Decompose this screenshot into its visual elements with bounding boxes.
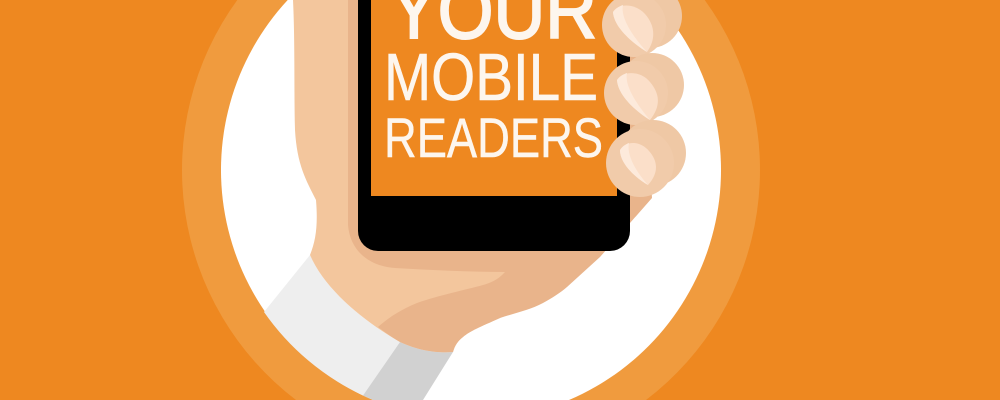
phone screen (371, 0, 617, 196)
screen text: MOBILE (384, 40, 598, 115)
cuff shadow (363, 342, 453, 400)
finger 1 (602, 0, 682, 57)
fingers (602, 0, 686, 197)
hand (293, 0, 652, 352)
finger 2 (604, 53, 684, 125)
white circle (221, 0, 721, 400)
outer ring (182, 0, 760, 400)
finger 3 (606, 120, 686, 197)
screen text: READERS (384, 106, 603, 169)
hand shadow (348, 0, 652, 352)
shirt cuff (264, 255, 453, 400)
phone (358, 0, 630, 251)
screen text (384, 0, 603, 169)
